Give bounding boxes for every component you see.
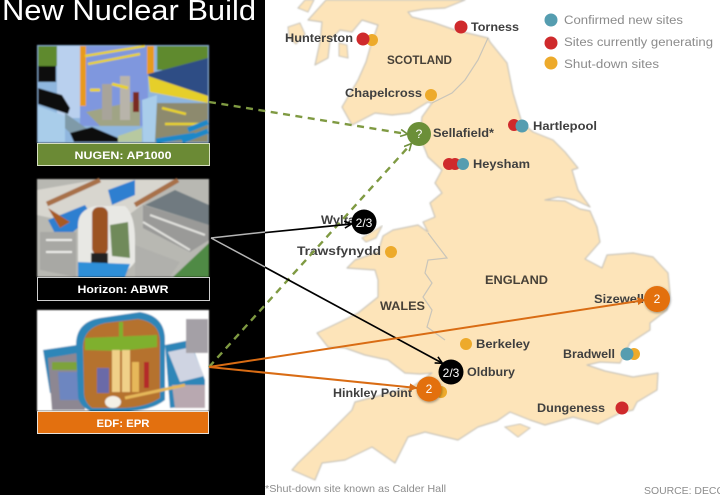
Isle of Wight bbox=[505, 424, 530, 437]
site labels: Hinkley Point bbox=[333, 388, 412, 400]
panel: Horizon ABWR bbox=[37, 179, 210, 300]
legend bbox=[544, 14, 713, 71]
site labels: Berkeley bbox=[476, 339, 531, 351]
badge: Sizewell: 2 bbox=[654, 292, 661, 306]
legend: Sites currently generating bbox=[564, 37, 713, 49]
site labels: Hartlepool bbox=[533, 121, 597, 133]
reactor illustration: EPR bbox=[37, 310, 209, 411]
reactor illustration: AP1000 bbox=[37, 45, 209, 143]
arrow: EDF dashed to Sellafield bbox=[209, 144, 411, 367]
arrow segments on black panel bbox=[211, 232, 265, 267]
badge: Hinkley Point bbox=[416, 376, 442, 402]
site labels: SCOTLAND bbox=[387, 55, 452, 67]
badge: Hinkley Point: 2 bbox=[426, 382, 433, 396]
arrow: EDF to Hinkley Point bbox=[209, 367, 417, 388]
site labels bbox=[285, 22, 644, 415]
caption: NuGen: NUGEN: AP1000 bbox=[74, 150, 172, 162]
badge: Oldbury: 2/3 bbox=[443, 366, 460, 380]
site labels: Hunterston bbox=[285, 33, 353, 45]
site labels: Bradwell bbox=[563, 349, 615, 361]
site labels: Sizewell bbox=[594, 294, 644, 306]
left black panel bbox=[0, 0, 265, 495]
panel: EDF EPR bbox=[37, 310, 209, 434]
badge: Sellafield bbox=[407, 122, 431, 146]
site labels: ENGLAND bbox=[485, 275, 548, 287]
reactor illustration: ABWR bbox=[37, 179, 209, 277]
site labels: Heysham bbox=[473, 159, 530, 171]
Anglesey bbox=[362, 226, 382, 242]
site labels: Torness bbox=[471, 22, 519, 34]
site labels: Dungeness bbox=[537, 403, 605, 415]
site labels: Oldbury bbox=[467, 367, 516, 379]
caption: Horizon: Horizon: ABWR bbox=[78, 284, 169, 296]
site labels: WALES bbox=[380, 301, 425, 313]
legend: Shut-down sites bbox=[564, 59, 659, 71]
arrow: EDF to Sizewell bbox=[209, 300, 645, 367]
badge: Wylfa bbox=[352, 210, 376, 234]
panel: NuGen AP1000 bbox=[37, 45, 210, 166]
legend: Confirmed new sites bbox=[564, 15, 683, 27]
arrow: NuGen to Sellafield bbox=[209, 102, 407, 134]
site labels: Wylfa bbox=[321, 215, 356, 227]
caption: EDF: EDF: EPR bbox=[96, 418, 150, 430]
badge: Sizewell bbox=[644, 286, 670, 312]
site dots bbox=[356, 20, 640, 414]
islands west of Scotland bbox=[288, 0, 348, 58]
badge: Oldbury bbox=[438, 360, 464, 384]
arrow: Horizon to Oldbury bbox=[211, 238, 442, 363]
badge: Sellafield: ? bbox=[416, 127, 423, 141]
footnote: *Shut-down site known as Calder Hall bbox=[265, 483, 446, 495]
site labels: Chapelcross bbox=[345, 88, 422, 100]
arrow: Horizon to Wylfa bbox=[211, 224, 351, 238]
badge: Wylfa: 2/3 bbox=[356, 216, 373, 230]
map of Great Britain bbox=[288, 0, 670, 480]
country borders bbox=[423, 38, 488, 340]
site labels: Sellafield* bbox=[433, 128, 495, 140]
site labels: Trawsfynydd bbox=[297, 246, 381, 258]
